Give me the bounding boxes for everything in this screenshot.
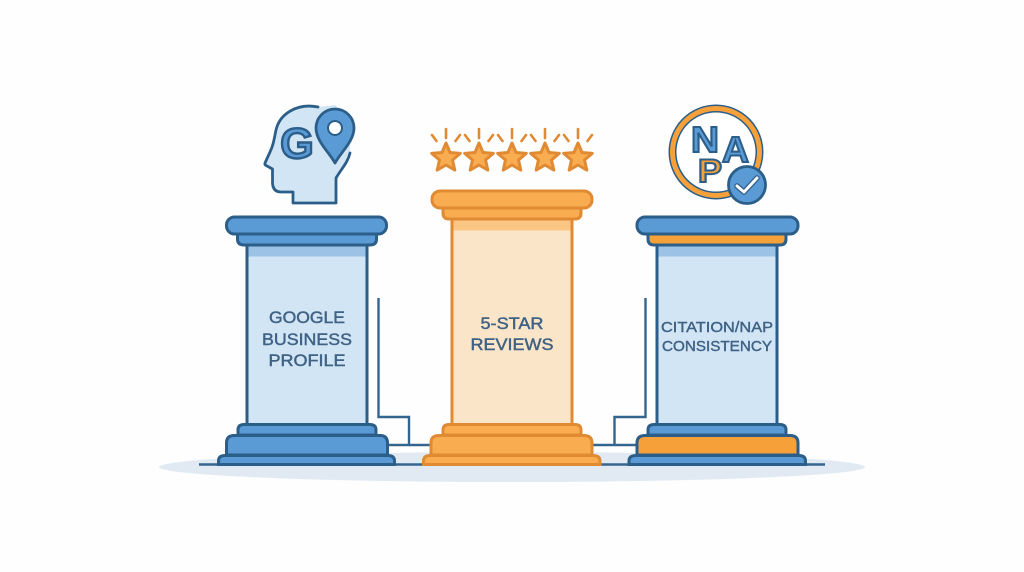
pillar: Google Business Profile <box>218 217 394 464</box>
letter G: G <box>280 120 314 168</box>
pillar label: CONSISTENCY <box>662 339 772 355</box>
pillar label: BUSINESS <box>262 331 352 349</box>
pillar label <box>661 320 773 355</box>
pillar label: 5-STAR <box>480 315 544 333</box>
connector lines <box>199 298 825 464</box>
icon: five stars with sparkles <box>432 129 592 170</box>
pillar label: GOOGLE <box>269 309 345 327</box>
icon: head with G and map pin <box>265 105 354 203</box>
pillar: Citation/NAP Consistency <box>629 217 806 464</box>
sparkles <box>432 129 592 141</box>
pillar label: REVIEWS <box>470 336 554 354</box>
icon: NAP badge with check <box>672 108 766 204</box>
check badge <box>728 166 766 204</box>
map pin <box>316 109 354 163</box>
pillar label <box>262 309 352 370</box>
stars <box>432 143 592 170</box>
pillar label <box>470 315 554 354</box>
pillar label: CITATION/NAP <box>661 320 773 336</box>
ground shadow <box>159 452 865 482</box>
pillar label: PROFILE <box>268 352 346 370</box>
letters NAP: P <box>698 153 722 189</box>
letters NAP <box>691 119 749 189</box>
letters NAP: A <box>722 129 749 170</box>
letters NAP: N <box>691 119 719 160</box>
pillar: 5-Star Reviews <box>424 191 600 464</box>
